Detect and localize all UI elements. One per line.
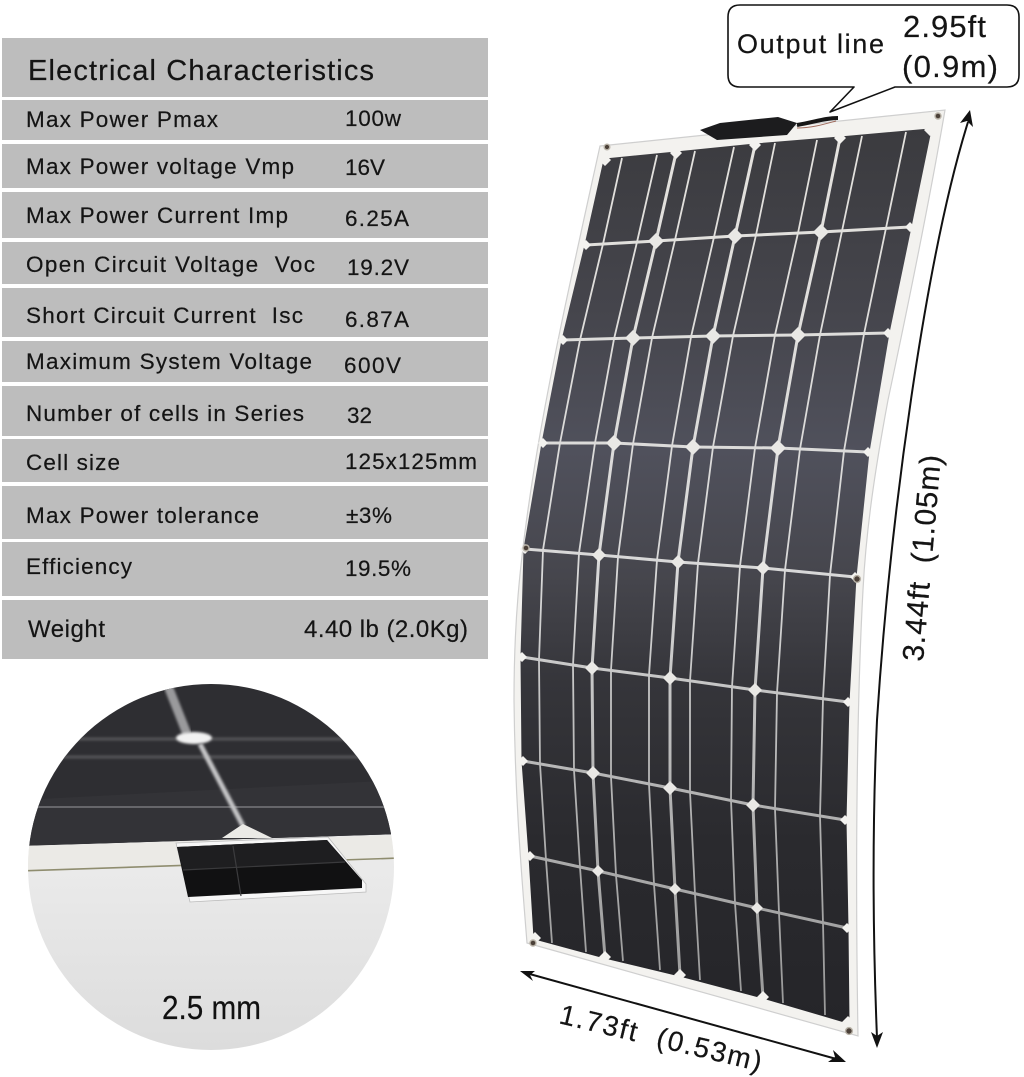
- cell edge chamfers: [517, 124, 936, 1028]
- row: Max Power voltage Vmp: [2, 144, 488, 188]
- row: Maximum System Voltage: 600V: [344, 353, 401, 378]
- row: Short Circuit Current Isc: Short Circuit Current Isc: [26, 303, 303, 328]
- arrow: panel height: [871, 110, 973, 1048]
- row: Efficiency: 19.5%: [345, 556, 411, 581]
- cell grid lines: [522, 138, 910, 997]
- row: Weight: [2, 600, 488, 659]
- row: Max Power Pmax: Max Power Pmax: [26, 107, 219, 132]
- row: Max Power Current Imp: Max Power Current Imp: [26, 203, 288, 228]
- row: Number of cells in Series: 32: [347, 403, 372, 428]
- cell busbars: [539, 132, 906, 1015]
- row: Weight: Weight: [28, 616, 105, 643]
- row: Max Power tolerance: Max Power tolerance: [26, 503, 259, 528]
- arrow: panel width: [520, 971, 846, 1062]
- callout: output line length: 2.95ft: [903, 9, 986, 44]
- row: Max Power Current Imp: 6.25A: [345, 206, 409, 231]
- row: Maximum System Voltage: [2, 341, 488, 382]
- panel backsheet: [514, 110, 945, 1036]
- junction box and output cable: [700, 117, 838, 140]
- row: Maximum System Voltage: Maximum System Voltage: [26, 349, 312, 374]
- row: Short Circuit Current Isc: [2, 288, 488, 337]
- label: panel height: 3.44ft (1.05m): [897, 454, 948, 663]
- row: Weight: 4.40 lb (2.0Kg): [304, 616, 468, 643]
- row: Cell size: [2, 439, 488, 482]
- row: Open Circuit Voltage Voc: [2, 242, 488, 284]
- row: Max Power voltage Vmp: Max Power voltage Vmp: [26, 154, 294, 179]
- row: Short Circuit Current Isc: 6.87A: [345, 307, 409, 332]
- grid junction diamonds: [585, 224, 829, 914]
- row: Efficiency: [2, 542, 488, 596]
- label: panel width: 1.73ft (0.53m): [557, 999, 765, 1077]
- flexible solar panel: [514, 110, 945, 1036]
- row: Open Circuit Voltage Voc: Open Circuit Voltage Voc: [26, 252, 315, 277]
- row: Cell size: Cell size: [26, 450, 120, 475]
- table header: Electrical Characteristics: Electrical Characteristics: [28, 55, 374, 87]
- callout: output line length: Output line: [737, 29, 884, 59]
- callout: output line length: (0.9m): [902, 49, 998, 84]
- row: Efficiency: Efficiency: [26, 554, 133, 579]
- row: Max Power Pmax: 100w: [345, 106, 402, 131]
- row: Max Power tolerance: [2, 486, 488, 539]
- row: Max Power voltage Vmp: 16V: [345, 155, 385, 180]
- row: Open Circuit Voltage Voc: 19.2V: [347, 255, 409, 280]
- specification table: [2, 38, 488, 659]
- row: Number of cells in Series: [2, 386, 488, 436]
- mounting holes: [523, 113, 941, 1034]
- table header: Electrical Characteristics: [2, 38, 488, 97]
- thickness detail circle: [20, 680, 400, 1060]
- row: Cell size: 125x125mm: [345, 449, 477, 474]
- row: Max Power Pmax: [2, 100, 488, 140]
- row: Max Power tolerance: ±3%: [346, 503, 392, 528]
- row: Number of cells in Series: Number of cells in Series: [26, 401, 304, 426]
- callout: output line length: [728, 5, 1019, 112]
- label: 2.5 mm: 2.5 mm: [162, 989, 261, 1026]
- solar cells: [522, 130, 930, 1022]
- row: Max Power Current Imp: [2, 192, 488, 238]
